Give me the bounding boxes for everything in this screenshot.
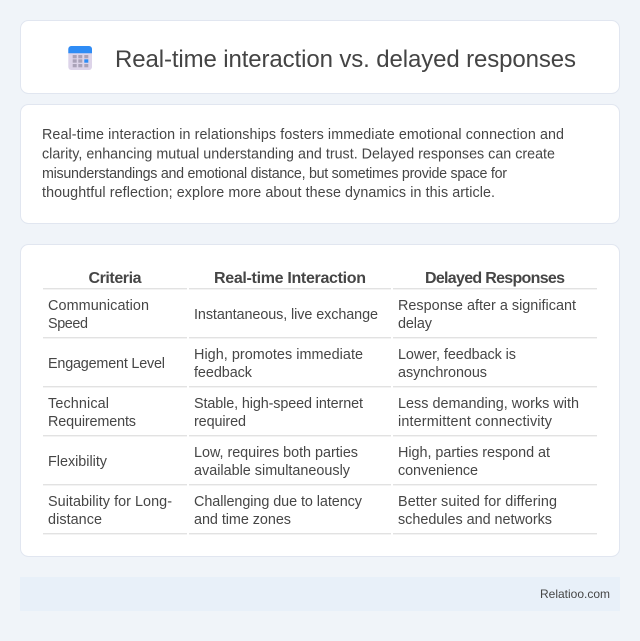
panel: introduction	[20, 104, 620, 224]
intro text: misunderstandings and emotional distance, but sometimes provide space for	[42, 166, 507, 182]
row: communication speed: Response after a significant	[398, 298, 576, 314]
row: flexibility: convenience	[398, 463, 478, 479]
footer credit: Relatioo.com	[540, 587, 610, 601]
row: flexibility: Low, requires both parties	[194, 445, 358, 461]
row: engagement level: Lower, feedback is	[398, 347, 516, 363]
panel: comparison table	[20, 244, 620, 556]
intro text: Real-time interaction in relationships fosters immediate emotional connection and	[42, 127, 564, 143]
row: communication speed	[48, 298, 576, 332]
row: suitability for long-distance: and time zones	[194, 512, 291, 528]
intro text: clarity, enhancing mutual understanding and trust. Delayed responses can create	[42, 146, 555, 162]
table header row: Criteria	[88, 270, 142, 287]
row: communication speed: delay	[398, 316, 433, 332]
title: Real-time interaction vs. delayed responses	[115, 46, 576, 73]
intro text: thoughtful reflection; explore more about these dynamics in this article.	[42, 185, 495, 201]
row: engagement level: asynchronous	[398, 365, 487, 381]
row: technical requirements: Less demanding, works with	[398, 396, 579, 412]
row: communication speed: Communication	[48, 298, 149, 314]
row: suitability for long-distance	[48, 494, 557, 528]
row: engagement level: feedback	[194, 365, 253, 381]
row: flexibility	[48, 445, 550, 479]
row: engagement level: High, promotes immediate	[194, 347, 363, 363]
row: flexibility: available simultaneously	[194, 463, 351, 479]
row: technical requirements: required	[194, 414, 246, 430]
footer	[20, 577, 620, 611]
row: technical requirements: Technical	[48, 396, 109, 412]
row: technical requirements	[48, 396, 579, 430]
row: suitability for long-distance: schedules and networks	[398, 512, 552, 528]
row: suitability for long-distance: Suitability for Long-	[48, 494, 172, 510]
row: engagement level	[48, 347, 516, 381]
table header row	[88, 270, 565, 287]
row: engagement level: Engagement Level	[48, 356, 165, 372]
intro text	[42, 127, 564, 201]
row: suitability for long-distance: Better suited for differing	[398, 494, 557, 510]
row: technical requirements: Requirements	[48, 414, 136, 430]
row: communication speed: Instantaneous, live exchange	[194, 307, 378, 323]
row: technical requirements: Stable, high-speed internet	[194, 396, 363, 412]
row: suitability for long-distance: Challenging due to latency	[194, 494, 363, 510]
row: suitability for long-distance: distance	[48, 512, 102, 528]
icon: calendar	[68, 46, 92, 70]
row: flexibility: High, parties respond at	[398, 445, 550, 461]
row: technical requirements: intermittent connectivity	[398, 414, 553, 430]
table header row: Delayed Responses	[425, 270, 565, 287]
row: flexibility: Flexibility	[48, 454, 108, 470]
panel: header	[20, 20, 620, 94]
table header row: Real-time Interaction	[214, 270, 366, 287]
row: communication speed: Speed	[48, 316, 88, 332]
